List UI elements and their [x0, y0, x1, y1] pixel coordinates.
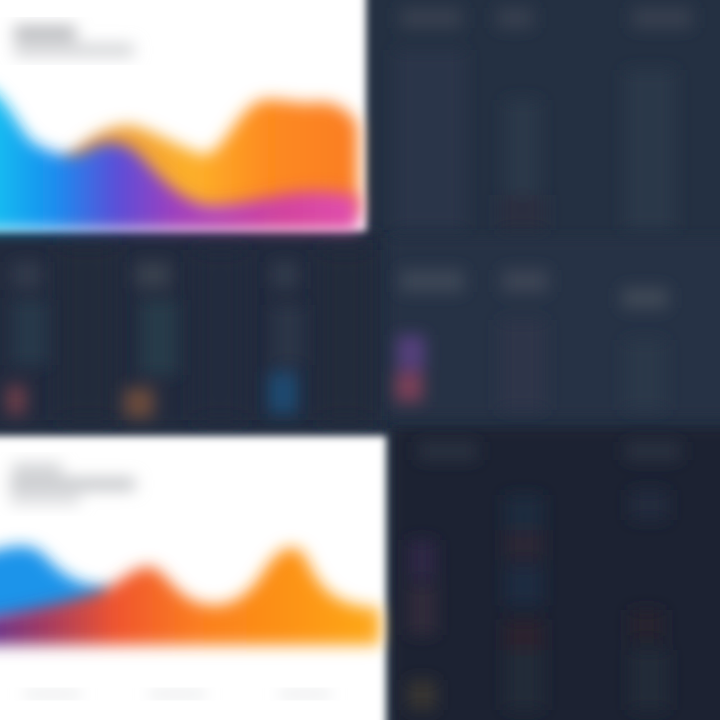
- area chart: orange layer: [60, 100, 358, 215]
- header placeholders bottom right: [418, 442, 681, 460]
- heading placeholder: [14, 26, 134, 56]
- panel: dark table bottom right: [392, 428, 720, 720]
- panel: top chart card: [0, 0, 366, 231]
- column headers: [12, 262, 298, 288]
- panel: bottom right details: [408, 442, 681, 710]
- table columns top right: [395, 50, 675, 230]
- panel: top right table: [395, 8, 692, 230]
- area chart: blue layer: [0, 546, 110, 622]
- cells bottom right: [408, 490, 668, 710]
- coloured row markers: [6, 372, 298, 418]
- panel: bottom chart card: [0, 436, 386, 720]
- panel: dark table middle left: [0, 232, 380, 428]
- column rows: [12, 300, 304, 375]
- area chart: blue to magenta layer: [0, 85, 358, 230]
- header placeholders middle right: [400, 270, 668, 308]
- panel: middle left table details: [6, 262, 304, 418]
- coloured bars middle right: [395, 335, 425, 402]
- heading placeholder: [10, 464, 135, 504]
- panel: middle right table: [390, 238, 720, 416]
- area chart: orange layer: [0, 548, 380, 645]
- x axis labels: [25, 690, 330, 698]
- header placeholders top right: [400, 8, 692, 28]
